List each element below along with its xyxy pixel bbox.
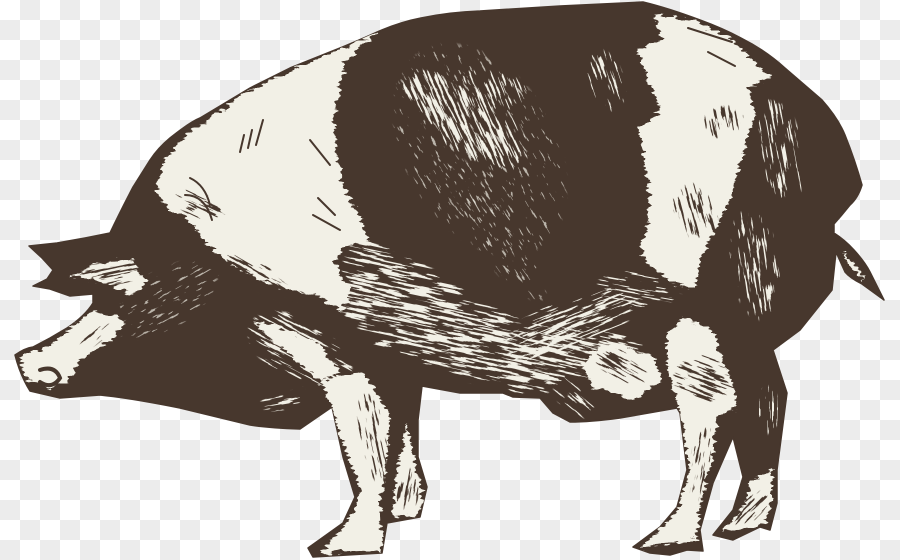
- marks: shoulder right: [310, 140, 340, 230]
- streaks: rear haunch: [758, 98, 802, 198]
- patch: front leg: [320, 373, 390, 553]
- hatch: shoulder lower edge: [226, 254, 306, 294]
- marks: shoulder top: [240, 120, 263, 152]
- patch: far hind leg: [722, 470, 772, 532]
- hatch: front leg: [356, 393, 390, 484]
- fur: dark hatching on cream: [63, 102, 778, 538]
- hatch: hind leg lower: [683, 420, 717, 510]
- streaks: shoulder-belly fringe: [247, 310, 354, 386]
- patch: far front leg: [392, 425, 423, 518]
- streaks: lower saddle: [433, 154, 547, 302]
- hatch: far hoof: [722, 482, 778, 538]
- hatch: rear patch lower: [672, 182, 718, 238]
- patch: ear: [72, 259, 147, 294]
- patch: shoulder: [156, 32, 378, 312]
- fur: pale streaks on dark areas: [120, 42, 802, 436]
- streaks: lower belly right: [504, 288, 636, 363]
- streaks: belly band: [338, 240, 644, 394]
- patch: udder: [583, 342, 663, 400]
- streaks: dense back cluster: [402, 68, 528, 171]
- engraved accent strokes: [40, 28, 735, 385]
- streaks: rear lower: [730, 211, 780, 322]
- patch: tail: [842, 252, 866, 282]
- hatch: snout: [80, 323, 110, 347]
- hatch: ear: [80, 259, 139, 286]
- hatch: hind leg upper: [663, 345, 747, 415]
- hatch: rear patch upper: [704, 104, 744, 139]
- streaks: second back cluster: [453, 70, 527, 110]
- patch: rear back: [637, 16, 772, 290]
- streaks: jowl specks: [260, 390, 300, 412]
- streaks: upper ear: [51, 240, 99, 254]
- hatch: neck swirl: [175, 190, 226, 219]
- streaks: upper right of dark saddle: [588, 49, 626, 112]
- patch: hind leg: [640, 317, 737, 548]
- streaks: below flank: [596, 271, 682, 307]
- patch: jowl wedge: [253, 323, 340, 380]
- marks: nostril: [40, 369, 60, 385]
- streaks: wide back sparse area: [392, 42, 568, 257]
- hatch: far front leg: [396, 468, 419, 510]
- streaks: far rear leg: [759, 384, 778, 436]
- marks: rear patch top: [688, 28, 735, 66]
- streaks: head specks: [120, 261, 219, 338]
- streaks: lower udder hatching: [552, 377, 594, 419]
- hatch: udder surface: [585, 337, 655, 393]
- patch: snout: [20, 310, 128, 387]
- marks: neck swirl: [185, 178, 212, 220]
